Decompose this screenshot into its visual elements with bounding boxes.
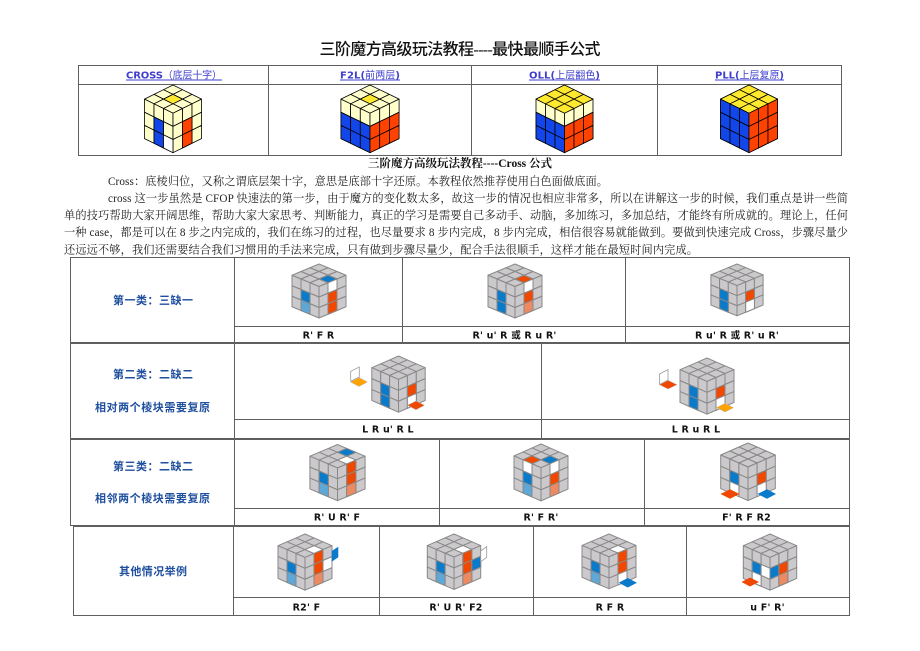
icon: cube R F R (582, 534, 637, 589)
icon: CROSS cube (144, 85, 202, 153)
icon: cube F' R F R2 (720, 443, 776, 501)
icon: cube L R u' R L (350, 356, 425, 412)
formula: F' R F R2: F' R F R2 (722, 512, 771, 524)
heading: CROSS: CROSS（底层十字） (126, 68, 222, 82)
icon: cube R' F R (292, 264, 346, 318)
label: category two: 第二类：二缺二 (113, 367, 193, 381)
subtitle: 三阶魔方高级玩法教程----Cross 公式 (368, 156, 552, 170)
icon: cube R' u' R (488, 264, 542, 318)
formula: R' U R' F2: R' U R' F2 (429, 602, 483, 614)
label: category one: 第一类：三缺一 (113, 293, 193, 307)
formula: R u' R or R' u R': R u' R 或 R' u R' (695, 330, 779, 342)
panel: category three (70, 440, 850, 526)
heading: PLL: PLL(上层复原) (715, 68, 784, 82)
label: category three: 相邻两个棱块需要复原 (95, 491, 210, 505)
icon: cube R' U R' F2 (427, 534, 487, 589)
text block: introduction: 单的技巧帮助大家开阔思维，帮助大家大家思考、判断能力，真正的学习是需要自己多动手、动脑，多加练习，多加总结，才能终有所成就的。理论上，任何 (64, 208, 848, 222)
label: category three: 第三类：二缺二 (113, 459, 193, 473)
formula: R2' F: R2' F (293, 602, 320, 614)
formula: R' F R: R' F R (303, 330, 335, 342)
icon: cube L R u R L (660, 358, 734, 414)
text block: introduction (64, 174, 849, 256)
icon: cube R2' F (278, 534, 338, 590)
formula: u F' R': u F' R' (750, 602, 785, 614)
label: category two: 相对两个棱块需要复原 (95, 400, 210, 414)
text block: introduction: Cross：底棱归位，又称之谓底层架十字，意思是底部十字还原。本教程依然推荐使用白色面做底面。 (108, 174, 608, 188)
formula: R' F R': R' F R' (524, 512, 558, 524)
formula: R' U R' F: R' U R' F (314, 512, 360, 524)
icon: cube R' F R' (514, 444, 568, 501)
panel: four stage overview table (78, 66, 842, 156)
text block: introduction: 一种 case，都是可以在 8 步之内完成的，我们在练习的过程，也尽量要求 8 步内完成，8 步内完成，相信很容易就能做到。要做到快速完成 Cross，步骤尽量少 (64, 225, 849, 239)
text block: introduction: cross 这一步虽然是 CFOP 快速法的第一步，由于魔方的变化数太多，故这一步的情况也相应非常多，所以在讲解这一步的时候，我们重点是讲一些简 (108, 191, 848, 205)
formula: L R u R L: L R u R L (672, 424, 720, 436)
title: 三阶魔方高级玩法教程----最快最顺手公式 (320, 40, 600, 58)
formula: R F R: R F R (596, 602, 625, 614)
icon: PLL cube (720, 85, 778, 153)
panel: category two (70, 344, 850, 438)
label: category two (95, 367, 210, 414)
panel: other examples (74, 526, 850, 616)
heading: F2L: F2L(前两层) (340, 68, 400, 82)
icon: cube R u' R (711, 264, 763, 316)
text block: introduction: 还远远不够，我们还需要结合我们习惯用的手法来完成，只有做到步骤尽量少，配合手法很顺手，这样才能在最短时间内完成。 (64, 242, 698, 256)
label: other examples: 其他情况举例 (119, 564, 187, 578)
label: category three (95, 459, 210, 505)
icon: cube R' U R' F (310, 444, 365, 501)
icon: OLL cube (536, 85, 593, 153)
icon: F2L cube (341, 85, 399, 153)
heading: OLL: OLL(上层翻色) (529, 68, 600, 82)
formula: L R u' R L: L R u' R L (362, 424, 414, 436)
panel: category one (70, 258, 850, 342)
icon: cube u F' R' (742, 534, 797, 590)
formula: R' u' R or R u R': R' u' R 或 R u R' (472, 330, 557, 342)
